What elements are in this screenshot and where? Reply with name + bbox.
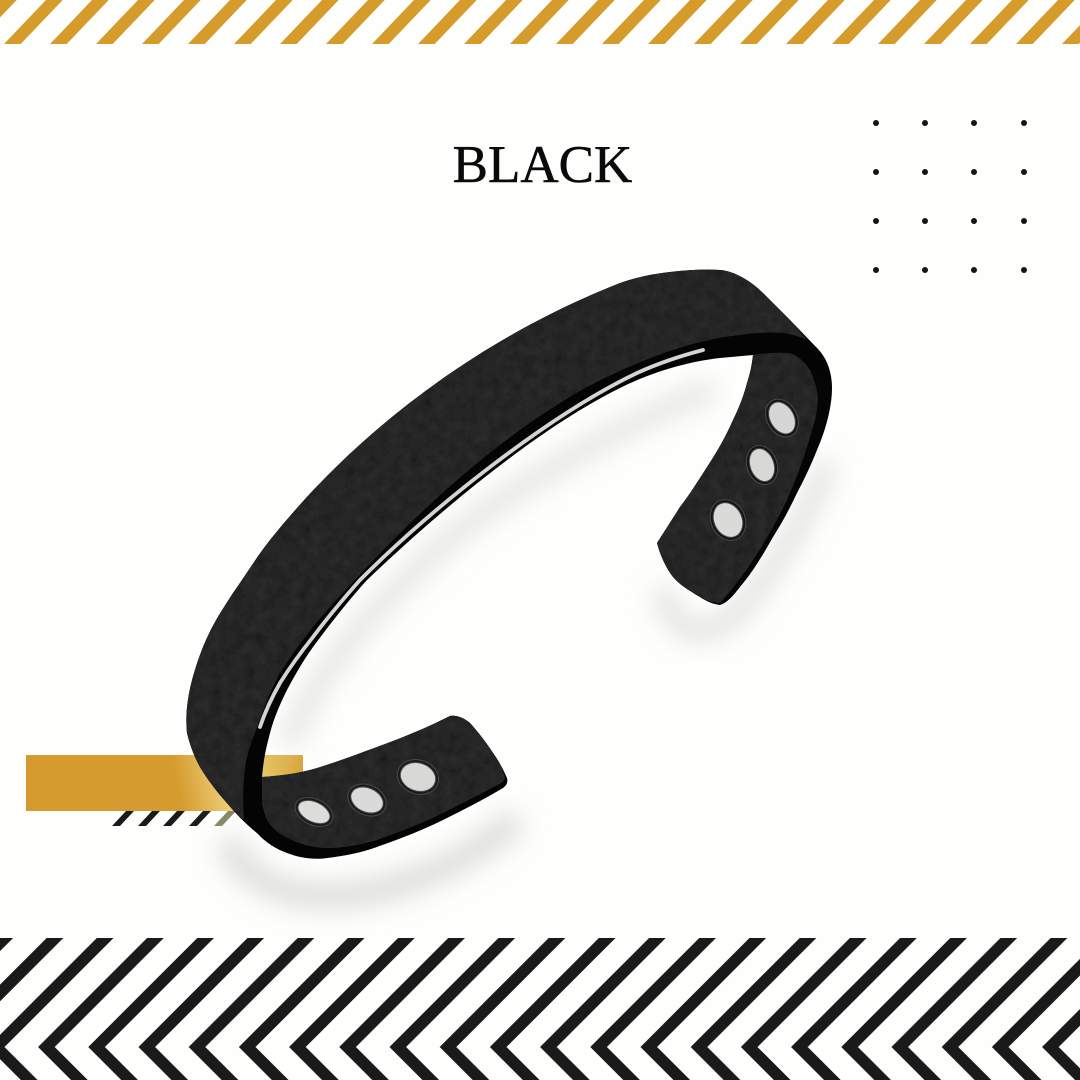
cuff band black rim silhouette <box>186 270 825 833</box>
bottom black chevron band <box>0 938 1080 1080</box>
bracelet <box>186 270 832 859</box>
silver inner highlight line <box>260 350 703 727</box>
small black slanted stripes <box>112 811 236 826</box>
matte inner surface right <box>657 353 818 603</box>
bracelet shadows <box>232 392 825 896</box>
cuff band matte outer surface <box>186 270 807 820</box>
top gold diagonal stripe band <box>0 0 1080 44</box>
magnets left <box>290 754 443 832</box>
decorative dot grid <box>873 120 1027 273</box>
right end of cuff <box>657 333 832 605</box>
left end of cuff <box>187 716 507 859</box>
title: BLACK <box>453 136 632 194</box>
matte inner surface left <box>260 716 505 848</box>
gold accent bar <box>26 755 303 811</box>
magnets right <box>704 393 805 546</box>
